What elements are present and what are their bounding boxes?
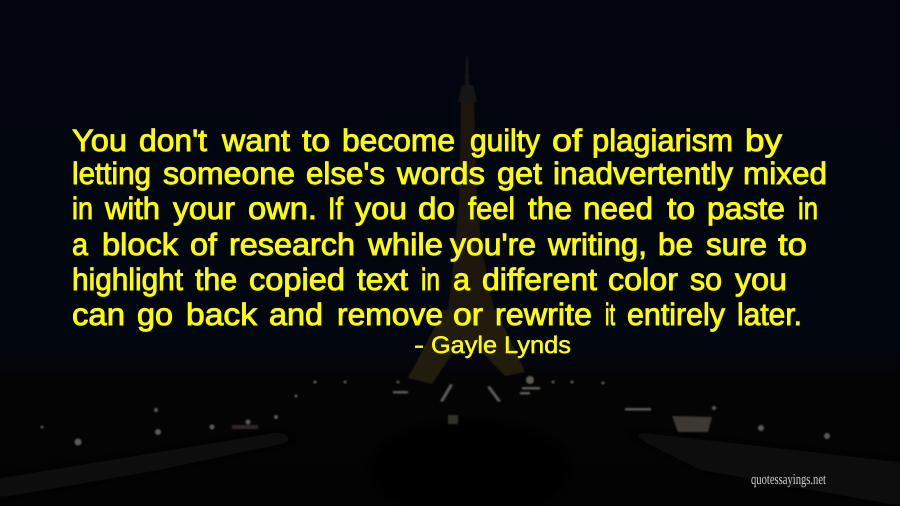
quote text: become xyxy=(342,123,455,158)
quote text: highlight xyxy=(72,262,183,297)
quote text: to xyxy=(778,227,807,262)
quote text: sure xyxy=(706,227,767,262)
illustration: city lights and lamps xyxy=(40,376,830,446)
quote text: feel xyxy=(468,191,515,226)
quote text: with xyxy=(104,191,160,226)
quote text: it xyxy=(605,297,615,332)
quote text: research xyxy=(229,227,355,262)
quote text: so xyxy=(690,262,722,297)
quote text: or xyxy=(453,297,483,332)
quote text: you xyxy=(355,191,407,226)
quote text: someone xyxy=(163,156,295,191)
quote text: color xyxy=(608,262,678,297)
quote text: own. xyxy=(248,191,317,226)
quote text: and xyxy=(269,297,323,332)
quote text: a xyxy=(453,262,471,297)
illustration: road and fountain foreground xyxy=(0,420,900,506)
quote text: in xyxy=(421,262,440,297)
quote text: plagiarism xyxy=(592,123,733,158)
quote text: you're xyxy=(450,227,536,262)
quote text: go xyxy=(137,297,173,332)
quote text: mixed xyxy=(743,156,827,191)
quote text: rewrite xyxy=(495,297,592,332)
quote text: a xyxy=(72,227,89,262)
quote text: inadvertently xyxy=(553,156,733,191)
quote text: do xyxy=(418,191,455,226)
quote text: want xyxy=(221,123,290,158)
quote text: the xyxy=(195,262,237,297)
author attribution: Lynds xyxy=(504,332,571,359)
quote text: need xyxy=(583,191,653,226)
quote text: remove xyxy=(337,297,443,332)
quote text: copied xyxy=(249,262,345,297)
illustration: Eiffel Tower xyxy=(408,56,525,384)
quote text: be xyxy=(658,227,693,262)
quote text: else's xyxy=(306,156,385,191)
quote text: get xyxy=(497,156,542,191)
quote text: the xyxy=(528,191,572,226)
quote text: of xyxy=(552,123,582,158)
quote text: back xyxy=(186,297,258,332)
author attribution xyxy=(414,332,571,359)
quote text: If xyxy=(328,191,343,226)
quote text: different xyxy=(482,262,597,297)
quote text: paste xyxy=(707,191,785,226)
quote text: to xyxy=(667,191,695,226)
quote text: words xyxy=(396,156,485,191)
quote text: block xyxy=(102,227,179,262)
author attribution: - xyxy=(414,332,424,359)
quote text: in xyxy=(798,191,818,226)
quote text: letting xyxy=(72,156,151,191)
quote text: text xyxy=(357,262,408,297)
quote text: entirely xyxy=(627,297,725,332)
quote text: later. xyxy=(737,297,802,332)
quote text: to xyxy=(302,123,330,158)
quote text: you xyxy=(735,262,787,297)
quote text: by xyxy=(745,123,783,158)
author attribution: Gayle xyxy=(431,332,497,359)
quote text: writing, xyxy=(547,227,647,262)
quote text: of xyxy=(190,227,217,262)
quote text: can xyxy=(72,297,125,332)
quote text: don't xyxy=(139,123,207,158)
quote text: your xyxy=(173,191,235,226)
watermark: quotessayings.net xyxy=(751,472,827,488)
quote text: guilty xyxy=(470,123,540,158)
quote text xyxy=(72,123,827,332)
quote text: while xyxy=(367,227,443,262)
quote text: You xyxy=(72,123,127,158)
quote text: in xyxy=(72,191,93,226)
